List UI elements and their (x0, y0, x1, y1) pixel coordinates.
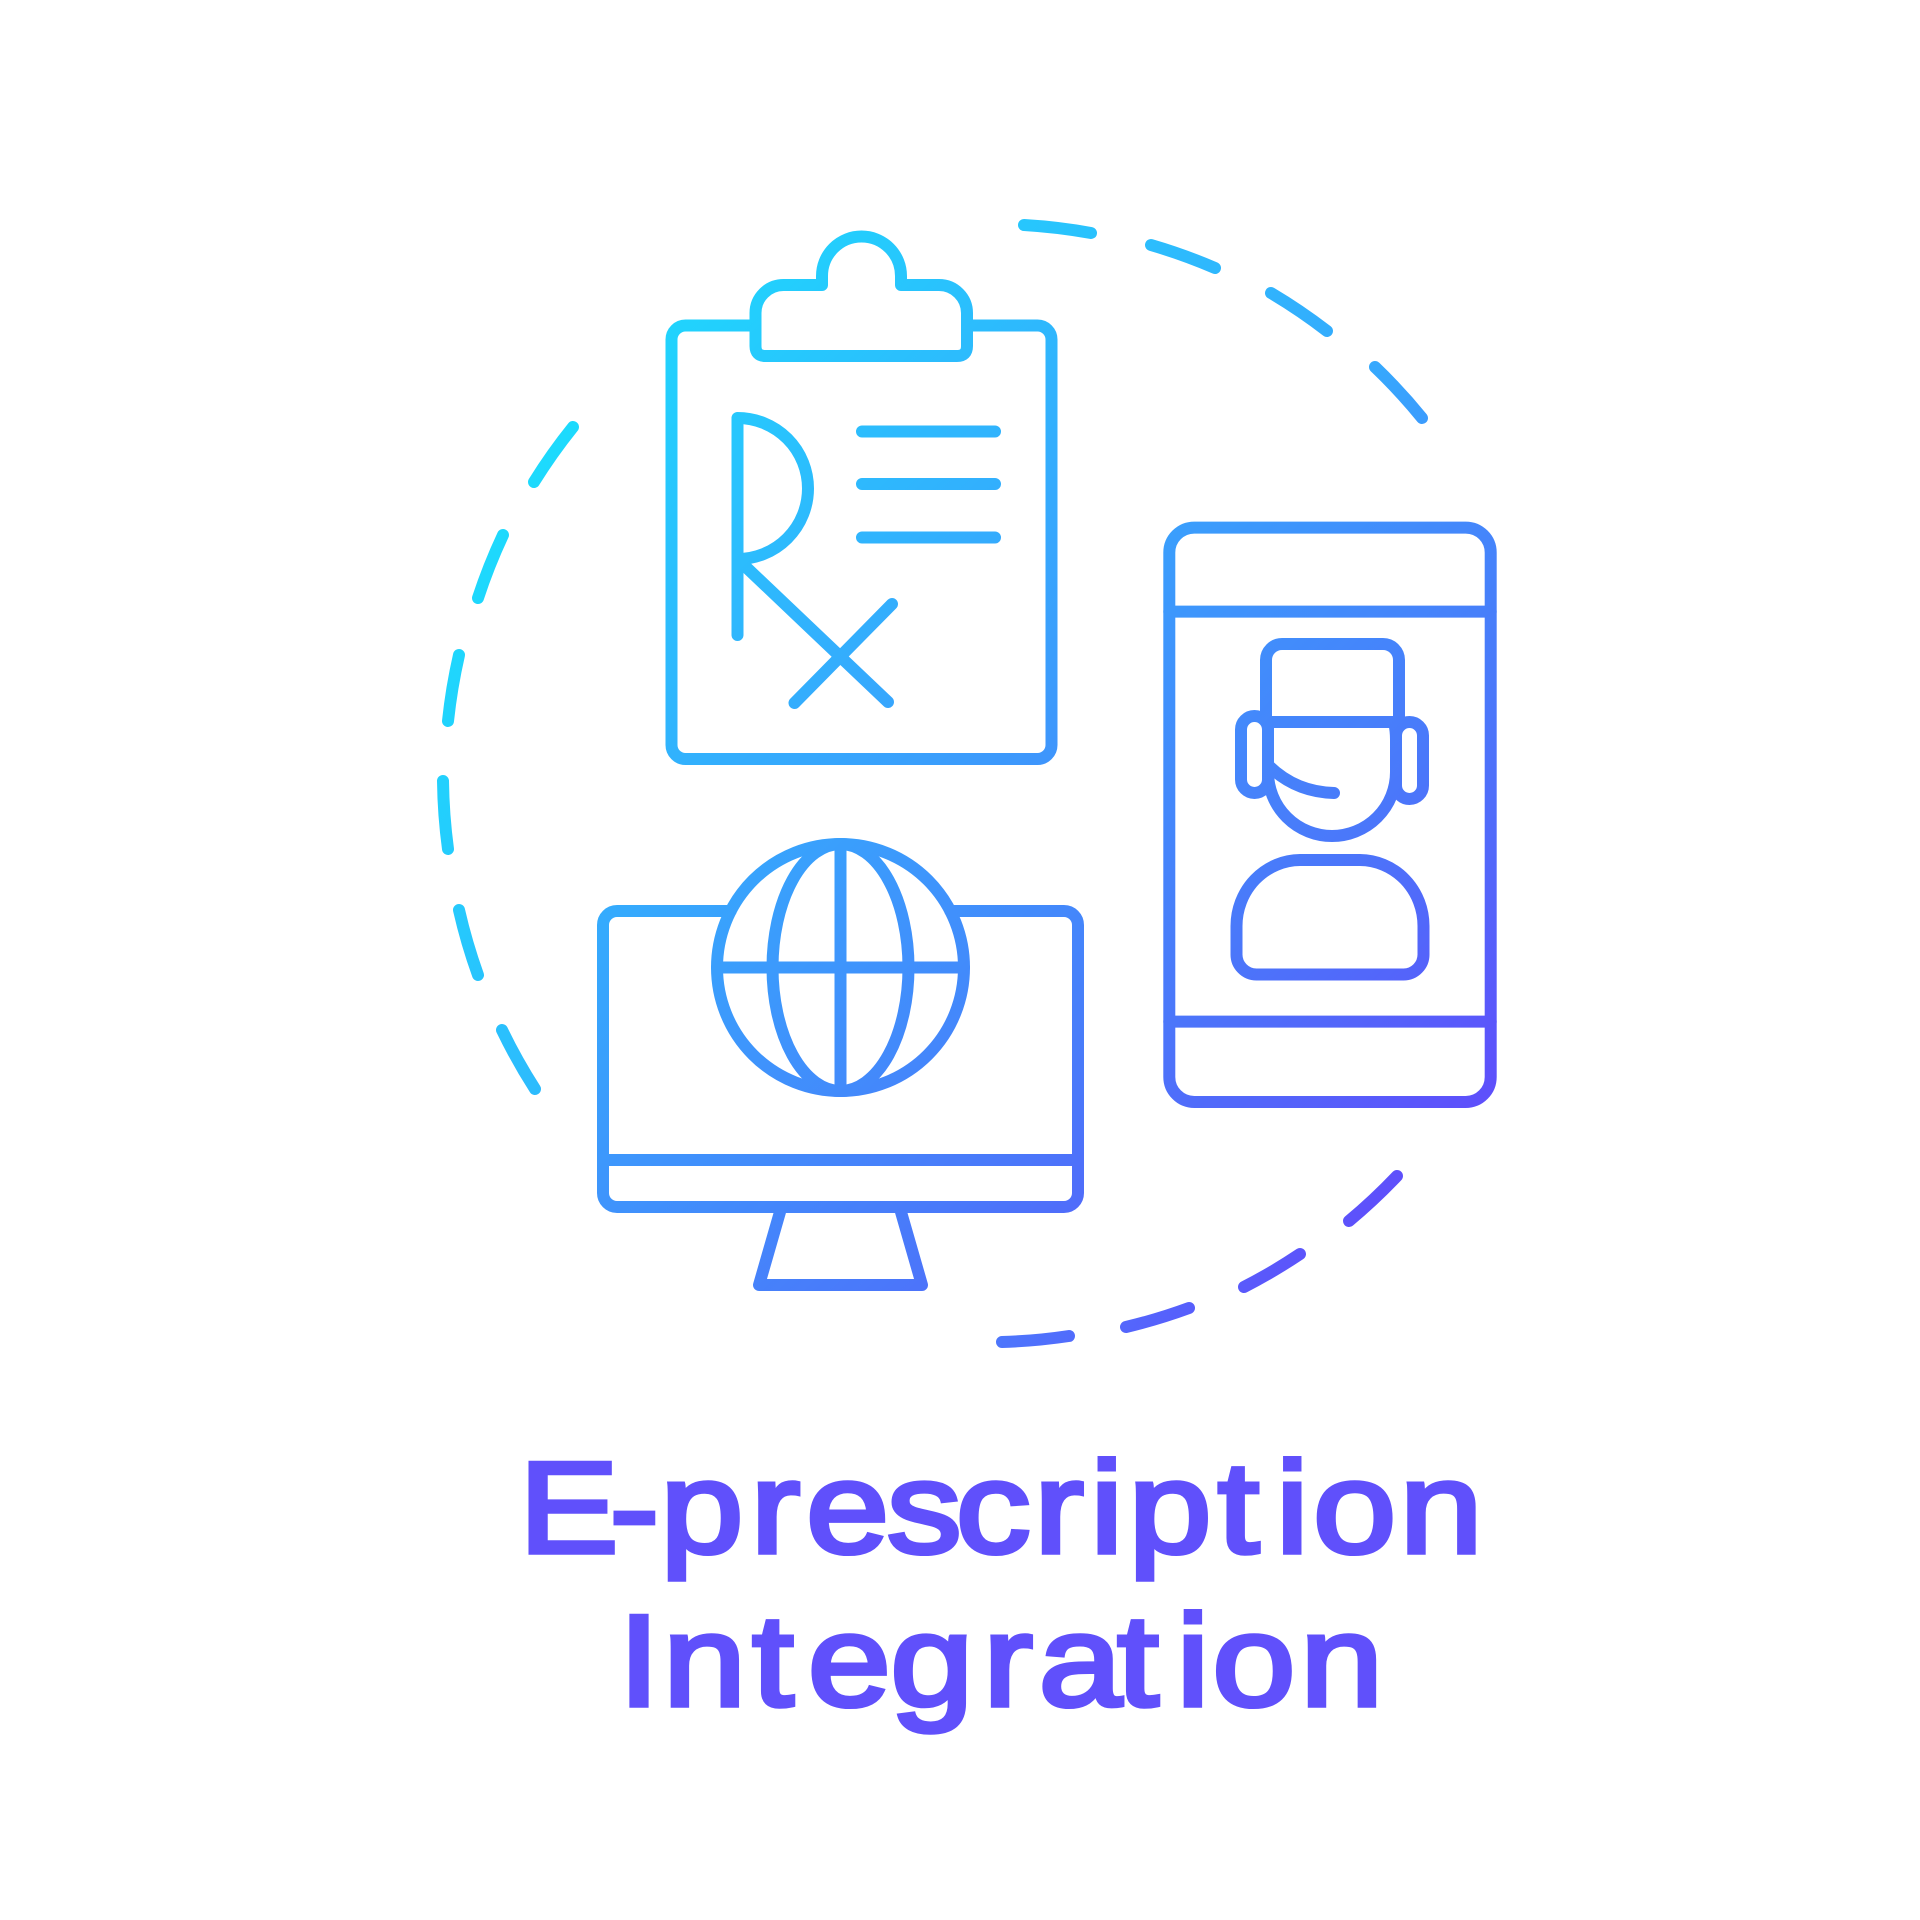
headset right ear (1396, 722, 1423, 799)
title (519, 1435, 1483, 1733)
monitor body (603, 911, 1078, 1207)
icon: clipboard with Rx prescription (672, 236, 1052, 759)
phone dividers (1169, 612, 1491, 1022)
headset microphone (1268, 765, 1334, 793)
globe (717, 844, 964, 1091)
dashed circle ring (443, 225, 1422, 1342)
doctor shoulders (1236, 860, 1424, 974)
prescription text lines (862, 432, 995, 538)
clipboard board (672, 326, 1052, 759)
monitor screen divider (603, 1154, 1078, 1166)
doctor cap (1266, 644, 1399, 722)
clipboard clip (756, 236, 967, 356)
title line 2: Integration (618, 1588, 1383, 1733)
icon: desktop monitor with globe (603, 844, 1078, 1285)
headset left ear (1241, 716, 1268, 793)
title line 1: E-prescription (519, 1435, 1483, 1580)
Rx symbol (738, 418, 892, 703)
phone body (1169, 528, 1491, 1102)
monitor stand (759, 1212, 922, 1285)
icon: smartphone with doctor (1169, 528, 1491, 1102)
doctor head (1268, 722, 1396, 836)
